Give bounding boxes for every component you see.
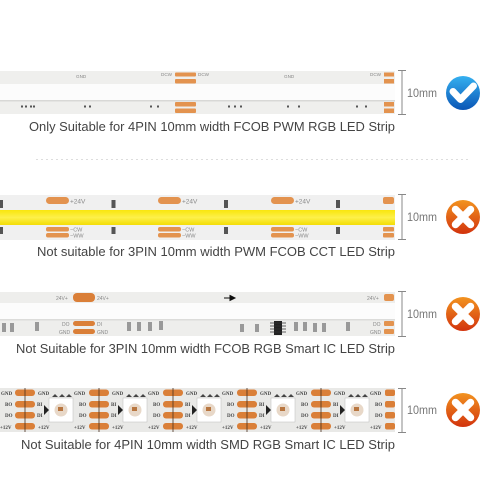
strip 4: SMD RGB Smart IC: +12V <box>38 426 50 431</box>
strip 2: PWM FCOB CCT: +24V <box>182 198 198 206</box>
label: 10mm strip 1: 10mm <box>407 86 437 100</box>
bracket: 10mm strip 3 <box>398 292 406 336</box>
strip 4: SMD RGB Smart IC: GND <box>186 392 198 397</box>
strip 4: SMD RGB Smart IC: DI <box>111 414 117 419</box>
strip 4: SMD RGB Smart IC: DO <box>301 414 309 419</box>
strip 4: SMD RGB Smart IC: +12V <box>222 426 234 431</box>
strip 4: SMD RGB Smart IC: GND <box>370 392 382 397</box>
bracket: 10mm strip 2 <box>398 194 406 240</box>
strip 1: FCOB PWM RGB: GND <box>76 74 87 79</box>
strip 4: SMD RGB Smart IC: GND <box>112 392 124 397</box>
strip 4: SMD RGB Smart IC: BO <box>375 403 382 408</box>
strip 4: SMD RGB Smart IC: GND <box>260 392 272 397</box>
strip 4: SMD RGB Smart IC: DO <box>79 414 87 419</box>
strip 4: SMD RGB Smart IC: GND <box>148 392 160 397</box>
strip 4: SMD RGB Smart IC: DO <box>153 414 161 419</box>
strip 4: SMD RGB Smart IC: GND <box>334 392 346 397</box>
strip 2: PWM FCOB CCT: −WW <box>295 234 309 240</box>
caption 4: Not Suitable for 4PIN 10mm width SMD RGB Smart IC LED Strip <box>21 437 395 452</box>
strip 4: SMD RGB Smart IC: +12V <box>74 426 86 431</box>
strip 4: SMD RGB Smart IC: +12V <box>370 426 382 431</box>
strip 4: SMD RGB Smart IC: BO <box>153 403 160 408</box>
strip 2: PWM FCOB CCT: −WW <box>182 234 196 240</box>
strip 4: SMD RGB Smart IC: BI <box>259 403 264 408</box>
label: 10mm strip 3: 10mm <box>407 307 437 321</box>
strip 1: FCOB PWM RGB: DCW <box>161 72 173 77</box>
strip 4: SMD RGB Smart IC: +12V <box>296 426 308 431</box>
strip 4: SMD RGB Smart IC: GND <box>74 392 86 397</box>
strip 4: SMD RGB Smart IC: BO <box>79 403 86 408</box>
strip 3: FCOB RGB Smart IC: GND <box>97 330 108 336</box>
strip 4: SMD RGB Smart IC: DI <box>185 414 191 419</box>
strip 4: SMD RGB Smart IC: GND <box>38 392 50 397</box>
icon: orange cross 2 <box>446 200 480 234</box>
strip 3: FCOB RGB Smart IC: 24V+ <box>56 296 68 302</box>
strip 2: PWM FCOB CCT: −CW <box>182 228 195 234</box>
strip 4: SMD RGB Smart IC <box>0 388 395 432</box>
strip 4: SMD RGB Smart IC: +12V <box>334 426 346 431</box>
strip 4: SMD RGB Smart IC: BI <box>333 403 338 408</box>
strip 4: SMD RGB Smart IC: GND <box>296 392 308 397</box>
strip 4: SMD RGB Smart IC: GND <box>222 392 234 397</box>
strip 4: SMD RGB Smart IC: BO <box>301 403 308 408</box>
strip 2: PWM FCOB CCT: −CW <box>70 228 83 234</box>
icon: orange cross 3 <box>446 297 480 331</box>
strip 3: FCOB RGB Smart IC: 24V+ <box>97 296 109 302</box>
caption 1: Only Suitable for 4PIN 10mm width FCOB PWM RGB LED Strip <box>29 119 395 134</box>
strip 3: FCOB RGB Smart IC <box>0 292 395 336</box>
caption 3: Not Suitable for 3PIN 10mm width FCOB RGB Smart IC LED Strip <box>16 341 395 356</box>
strip 4: SMD RGB Smart IC: DO <box>227 414 235 419</box>
icon: blue check <box>446 76 480 110</box>
strip 4: SMD RGB Smart IC: +12V <box>260 426 272 431</box>
caption 2: Not suitable for 3PIN 10mm width PWM FCOB CCT LED Strip <box>37 244 395 259</box>
strip 2: PWM FCOB CCT <box>0 195 395 240</box>
strip 1: FCOB PWM RGB: DCW <box>198 72 210 77</box>
strip 4: SMD RGB Smart IC: DO <box>5 414 13 419</box>
strip 4: SMD RGB Smart IC: BI <box>185 403 190 408</box>
strip 1: FCOB PWM RGB <box>0 71 395 114</box>
strip 4: SMD RGB Smart IC: +12V <box>0 426 12 431</box>
bracket: 10mm strip 1 <box>398 70 406 114</box>
label: 10mm strip 2: 10mm <box>407 210 437 224</box>
strip 2: PWM FCOB CCT: +24V <box>295 198 311 206</box>
strip 3: FCOB RGB Smart IC: DO <box>62 322 70 328</box>
strip 3: FCOB RGB Smart IC: DO <box>373 322 381 328</box>
strip 3: FCOB RGB Smart IC: 24V+ <box>367 296 379 302</box>
strip 2: PWM FCOB CCT: −CW <box>295 228 308 234</box>
strip 4: SMD RGB Smart IC: +12V <box>186 426 198 431</box>
strip 1: FCOB PWM RGB: DCW <box>370 72 382 77</box>
strip 4: SMD RGB Smart IC: DO <box>375 414 383 419</box>
strip 2: PWM FCOB CCT: −WW <box>70 234 84 240</box>
label: 10mm strip 4: 10mm <box>407 403 437 417</box>
icon: orange cross 4 <box>446 393 480 427</box>
strip 4: SMD RGB Smart IC: DI <box>259 414 265 419</box>
strip 3: FCOB RGB Smart IC: GND <box>370 330 382 336</box>
strip 4: SMD RGB Smart IC: DI <box>333 414 339 419</box>
bracket: 10mm strip 4 <box>398 388 406 432</box>
strip 4: SMD RGB Smart IC: +12V <box>112 426 124 431</box>
strip 4: SMD RGB Smart IC: DI <box>37 414 43 419</box>
strip 4: SMD RGB Smart IC: BI <box>111 403 116 408</box>
strip 2: PWM FCOB CCT: +24V <box>70 198 86 206</box>
strip 4: SMD RGB Smart IC: BI <box>37 403 42 408</box>
strip 4: SMD RGB Smart IC: BO <box>5 403 12 408</box>
strip 4: SMD RGB Smart IC: +12V <box>148 426 160 431</box>
strip 3: FCOB RGB Smart IC: DI <box>97 322 102 328</box>
strip 4: SMD RGB Smart IC: GND <box>1 392 12 397</box>
strip 1: FCOB PWM RGB: GND <box>284 74 295 79</box>
strip 4: SMD RGB Smart IC: BO <box>227 403 234 408</box>
strip 3: FCOB RGB Smart IC: GND <box>59 330 70 336</box>
